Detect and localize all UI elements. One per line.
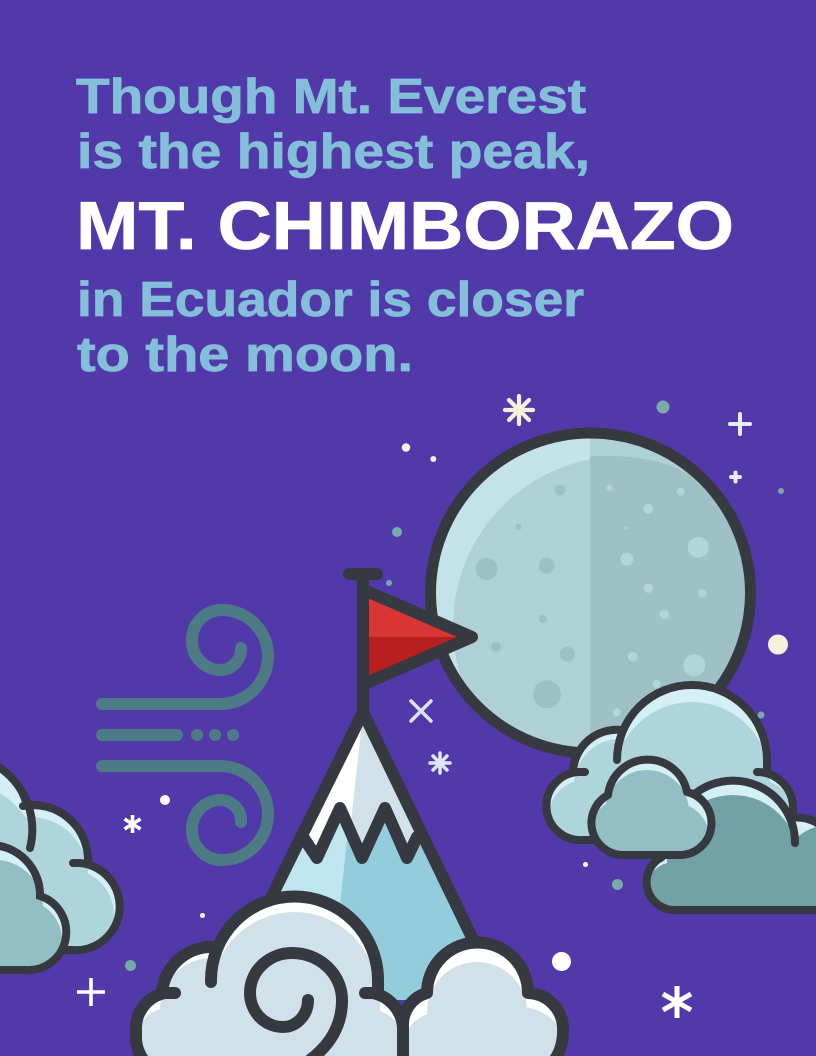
cloud: mid front (591, 760, 711, 878)
cloud: left front (0, 845, 66, 980)
swirl line (250, 953, 342, 1056)
red flag (363, 590, 472, 684)
cloud: light back (546, 685, 797, 860)
dots (125, 400, 788, 971)
moon craters, dark side (476, 484, 575, 708)
clouds at bottom (134, 897, 568, 1056)
heading line: Though Mt. Everest: Though Mt. Everest (76, 70, 586, 124)
snow cap (304, 723, 420, 858)
swirl highlight (258, 952, 330, 975)
cloud: small right (402, 942, 568, 1056)
heading line: in Ecuador is closer: in Ecuador is closer (77, 273, 584, 327)
star: cross (411, 701, 431, 721)
moon craters, light side (607, 485, 709, 716)
mountain outline (270, 712, 478, 950)
mountain body (268, 712, 478, 1000)
star: light asterisk (430, 753, 450, 773)
stars and dots (77, 396, 788, 1018)
flag pole (349, 574, 377, 712)
clouds at right (546, 685, 816, 927)
heading line: is the highest peak,: is the highest peak, (77, 125, 590, 179)
star: white plus bottom left (77, 978, 105, 1006)
upper wind swirl (102, 610, 268, 704)
clouds at left (0, 762, 120, 980)
wind swirls (102, 610, 268, 860)
star: white asterisk bottom (663, 986, 691, 1018)
headline text (76, 70, 734, 382)
heading line: to the moon.: to the moon. (77, 328, 413, 382)
cloud: dark lower right (645, 780, 816, 927)
star: cream asterisk top (505, 396, 533, 424)
star: white asterisk left (124, 815, 140, 833)
heading line: MT. CHIMBORAZO: MT. CHIMBORAZO (76, 188, 734, 264)
star: plus small (731, 472, 740, 482)
snow zigzag (303, 808, 417, 858)
middle wind line and dots (102, 729, 233, 741)
icon: moon (425, 428, 756, 758)
cloud: left back (0, 762, 120, 961)
mountain with flag (268, 574, 478, 1000)
star: plus large (730, 414, 750, 434)
cloud: large swirl (134, 897, 407, 1056)
lower wind swirl (102, 766, 268, 860)
